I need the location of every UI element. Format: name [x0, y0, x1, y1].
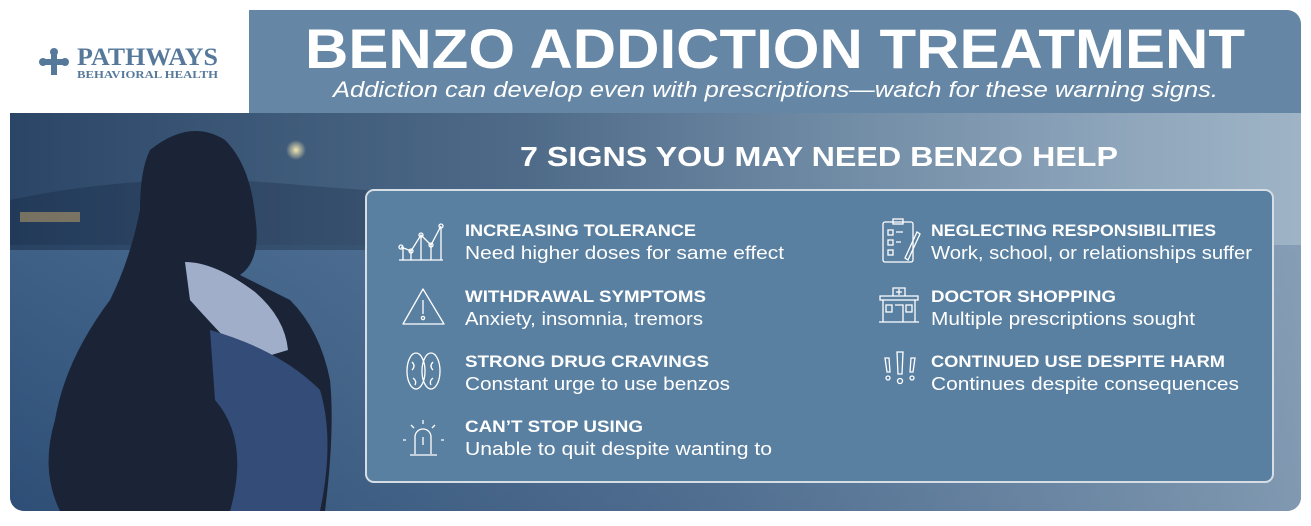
icon: chart — [399, 224, 443, 260]
item: increasing tolerance: INCREASING TOLERANCE — [465, 221, 696, 240]
logo area: PATHWAYS — [77, 44, 218, 71]
item: continued use — [931, 352, 1239, 394]
icon: siren — [403, 420, 444, 455]
icon: warning — [403, 289, 444, 324]
item: cravings: Constant urge to use benzos — [465, 374, 730, 394]
item: doctor shopping: DOCTOR SHOPPING — [931, 287, 1116, 306]
icon: cross — [39, 48, 69, 75]
item: cravings — [465, 352, 730, 394]
woman silhouette — [49, 131, 332, 511]
icon: clipboard — [883, 219, 920, 262]
icon: exclamations — [885, 352, 915, 384]
item: can't stop — [465, 417, 772, 459]
item: continued use: CONTINUED USE DESPITE HARM — [931, 352, 1225, 371]
item: withdrawal: Anxiety, insomnia, tremors — [465, 309, 703, 329]
header band — [249, 10, 1301, 113]
item: withdrawal: WITHDRAWAL SYMPTOMS — [465, 287, 706, 306]
subtitle: Addiction can develop even with prescriptions—watch for these warning signs. — [331, 77, 1218, 102]
item: neglecting: Work, school, or relationships suffer — [931, 243, 1252, 263]
item: doctor shopping — [931, 287, 1195, 329]
item: can't stop: CAN’T STOP USING — [465, 417, 643, 436]
item: increasing tolerance: Need higher doses for same effect — [465, 243, 784, 263]
background photo — [10, 113, 1301, 511]
item: increasing tolerance — [465, 221, 784, 263]
panel: signs — [366, 190, 1273, 482]
item: neglecting — [931, 221, 1252, 263]
title: BENZO ADDICTION TREATMENT — [305, 17, 1245, 80]
icon: brain — [407, 353, 440, 389]
section heading: 7 SIGNS YOU MAY NEED BENZO HELP — [520, 141, 1118, 172]
item: withdrawal — [465, 287, 706, 329]
item: continued use: Continues despite consequences — [931, 374, 1239, 394]
icon: clinic — [879, 288, 919, 322]
item: can't stop: Unable to quit despite wanting to — [465, 439, 772, 459]
item: neglecting: NEGLECTING RESPONSIBILITIES — [931, 221, 1216, 240]
item: doctor shopping: Multiple prescriptions sought — [931, 309, 1195, 329]
logo area — [39, 48, 218, 78]
item: cravings: STRONG DRUG CRAVINGS — [465, 352, 709, 371]
logo area: BEHAVIORAL HEALTH — [77, 69, 219, 81]
